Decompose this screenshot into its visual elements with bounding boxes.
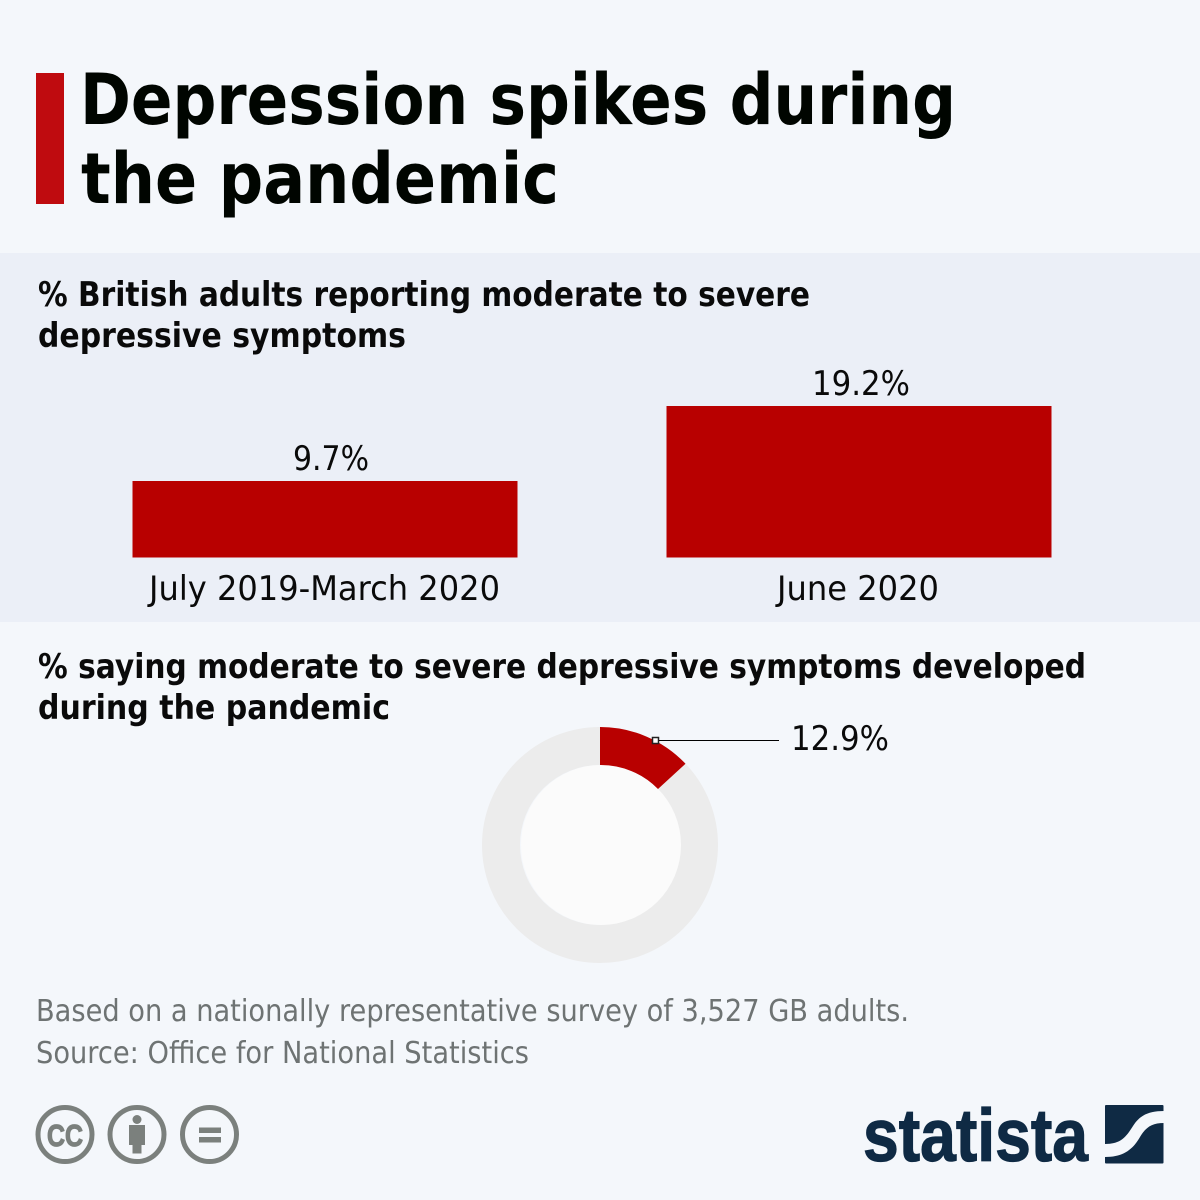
title: the pandemic — [81, 138, 559, 220]
heading: developed during the pandemic: during the pandemic — [38, 688, 390, 728]
heading: British adults: % British adults reporting moderate to severe — [38, 275, 810, 315]
callout: 12.9% — [652, 719, 889, 759]
heading: British adults — [38, 275, 810, 356]
icon: attribution — [110, 1108, 164, 1162]
heading: developed during the pandemic — [38, 647, 1086, 728]
bar: July 2019-March 2020: July 2019-March 2020 — [147, 569, 500, 609]
donut segment: 12.9% — [600, 727, 686, 789]
callout: 12.9%: 12.9% — [791, 719, 889, 759]
icon: creative commons — [38, 1108, 92, 1162]
source note — [36, 994, 909, 1071]
panel: British adults bar chart — [0, 253, 1200, 622]
icon: no derivatives — [182, 1108, 236, 1162]
title: Depression spikes during — [80, 59, 956, 141]
source note: Based on a nationally representative survey of 3,527 GB adults. — [36, 994, 909, 1029]
bar: June 2020 — [666, 364, 1052, 609]
source note: Source: Office for National Statistics — [36, 1036, 529, 1071]
bar: July 2019-March 2020 — [132, 439, 518, 609]
bar: June 2020: 19.2% — [812, 364, 910, 404]
title — [80, 59, 956, 220]
logo mark — [1105, 1105, 1164, 1164]
donut chart — [501, 719, 889, 944]
bar: July 2019-March 2020: 9.7% — [293, 439, 369, 479]
title accent bar — [36, 73, 64, 204]
icon: creative commons: CC — [47, 1118, 83, 1153]
bar: June 2020: June 2020 — [775, 569, 939, 609]
heading: British adults: depressive symptoms — [38, 316, 406, 356]
logo: statista: statista — [863, 1094, 1089, 1177]
